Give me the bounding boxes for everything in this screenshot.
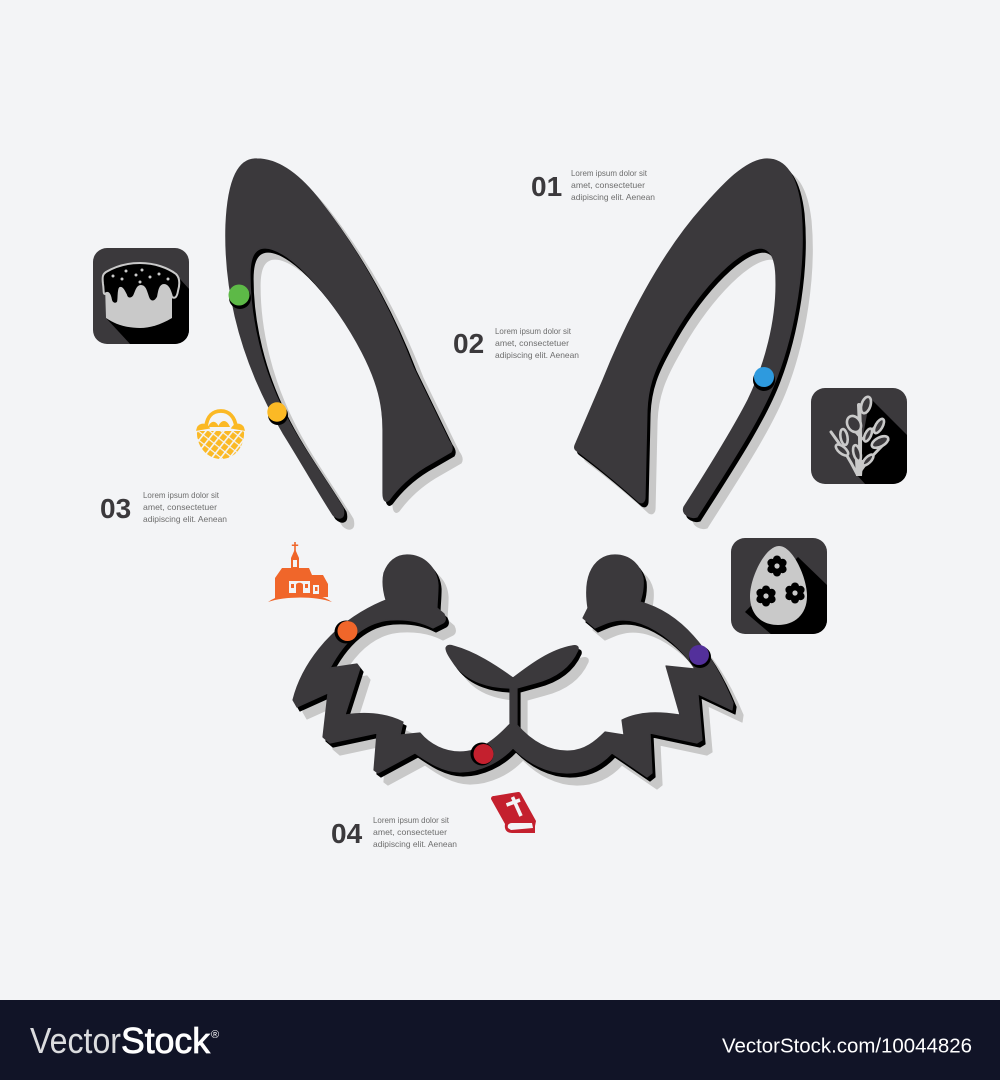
marker: red dot — [470, 742, 494, 766]
marker: purple dot — [689, 645, 711, 668]
willow base — [855, 460, 863, 476]
text 03: adipiscing elit. Aenean — [143, 514, 227, 524]
marker: yellow dot — [267, 402, 288, 425]
marker: blue dot — [753, 367, 775, 391]
icon: Easter cake tile — [93, 248, 190, 345]
block 01 — [531, 168, 655, 202]
text 04 — [373, 815, 457, 849]
footer logo — [30, 1020, 219, 1061]
text 04: adipiscing elit. Aenean — [373, 839, 457, 849]
icon: bible book — [491, 792, 536, 833]
number 02: 02 — [453, 328, 484, 359]
text 02 — [495, 326, 579, 360]
marker: orange dot — [334, 620, 358, 644]
footer image id: VectorStock.com/10044826 — [722, 1036, 972, 1058]
church door and window panes — [291, 583, 318, 594]
church walls and windows — [289, 560, 319, 594]
text 02: amet, consectetuer — [495, 338, 569, 348]
number 01: 01 — [531, 171, 562, 202]
block 04 — [331, 815, 457, 849]
text 01: amet, consectetuer — [571, 180, 645, 190]
block 03 — [100, 490, 227, 524]
icon: willow branch tile — [811, 388, 908, 485]
text 01: Lorem ipsum dolor sit — [571, 168, 648, 178]
footer logo: Vector — [30, 1020, 121, 1061]
left ear — [226, 159, 462, 529]
icon: decorated egg tile — [731, 538, 828, 635]
bunny face: nose, whiskers and paws — [293, 555, 743, 789]
text 02: adipiscing elit. Aenean — [495, 350, 579, 360]
text 04: amet, consectetuer — [373, 827, 447, 837]
text 03 — [143, 490, 227, 524]
number 04: 04 — [331, 818, 363, 849]
footer band — [0, 1000, 1000, 1080]
footer logo: ® — [211, 1029, 219, 1041]
text 03: Lorem ipsum dolor sit — [143, 490, 220, 500]
text 04: Lorem ipsum dolor sit — [373, 815, 450, 825]
text 01: adipiscing elit. Aenean — [571, 192, 655, 202]
number 03: 03 — [100, 493, 131, 524]
text 01 — [571, 168, 655, 202]
text 03: amet, consectetuer — [143, 502, 217, 512]
block 02 — [453, 326, 579, 360]
marker: green dot — [228, 284, 251, 309]
footer logo: Stock — [121, 1020, 211, 1061]
flowers on egg — [756, 556, 805, 606]
text 02: Lorem ipsum dolor sit — [495, 326, 572, 336]
icon: basket — [197, 411, 244, 459]
cross — [506, 797, 521, 816]
icon: church — [268, 542, 332, 602]
right ear — [575, 159, 812, 529]
